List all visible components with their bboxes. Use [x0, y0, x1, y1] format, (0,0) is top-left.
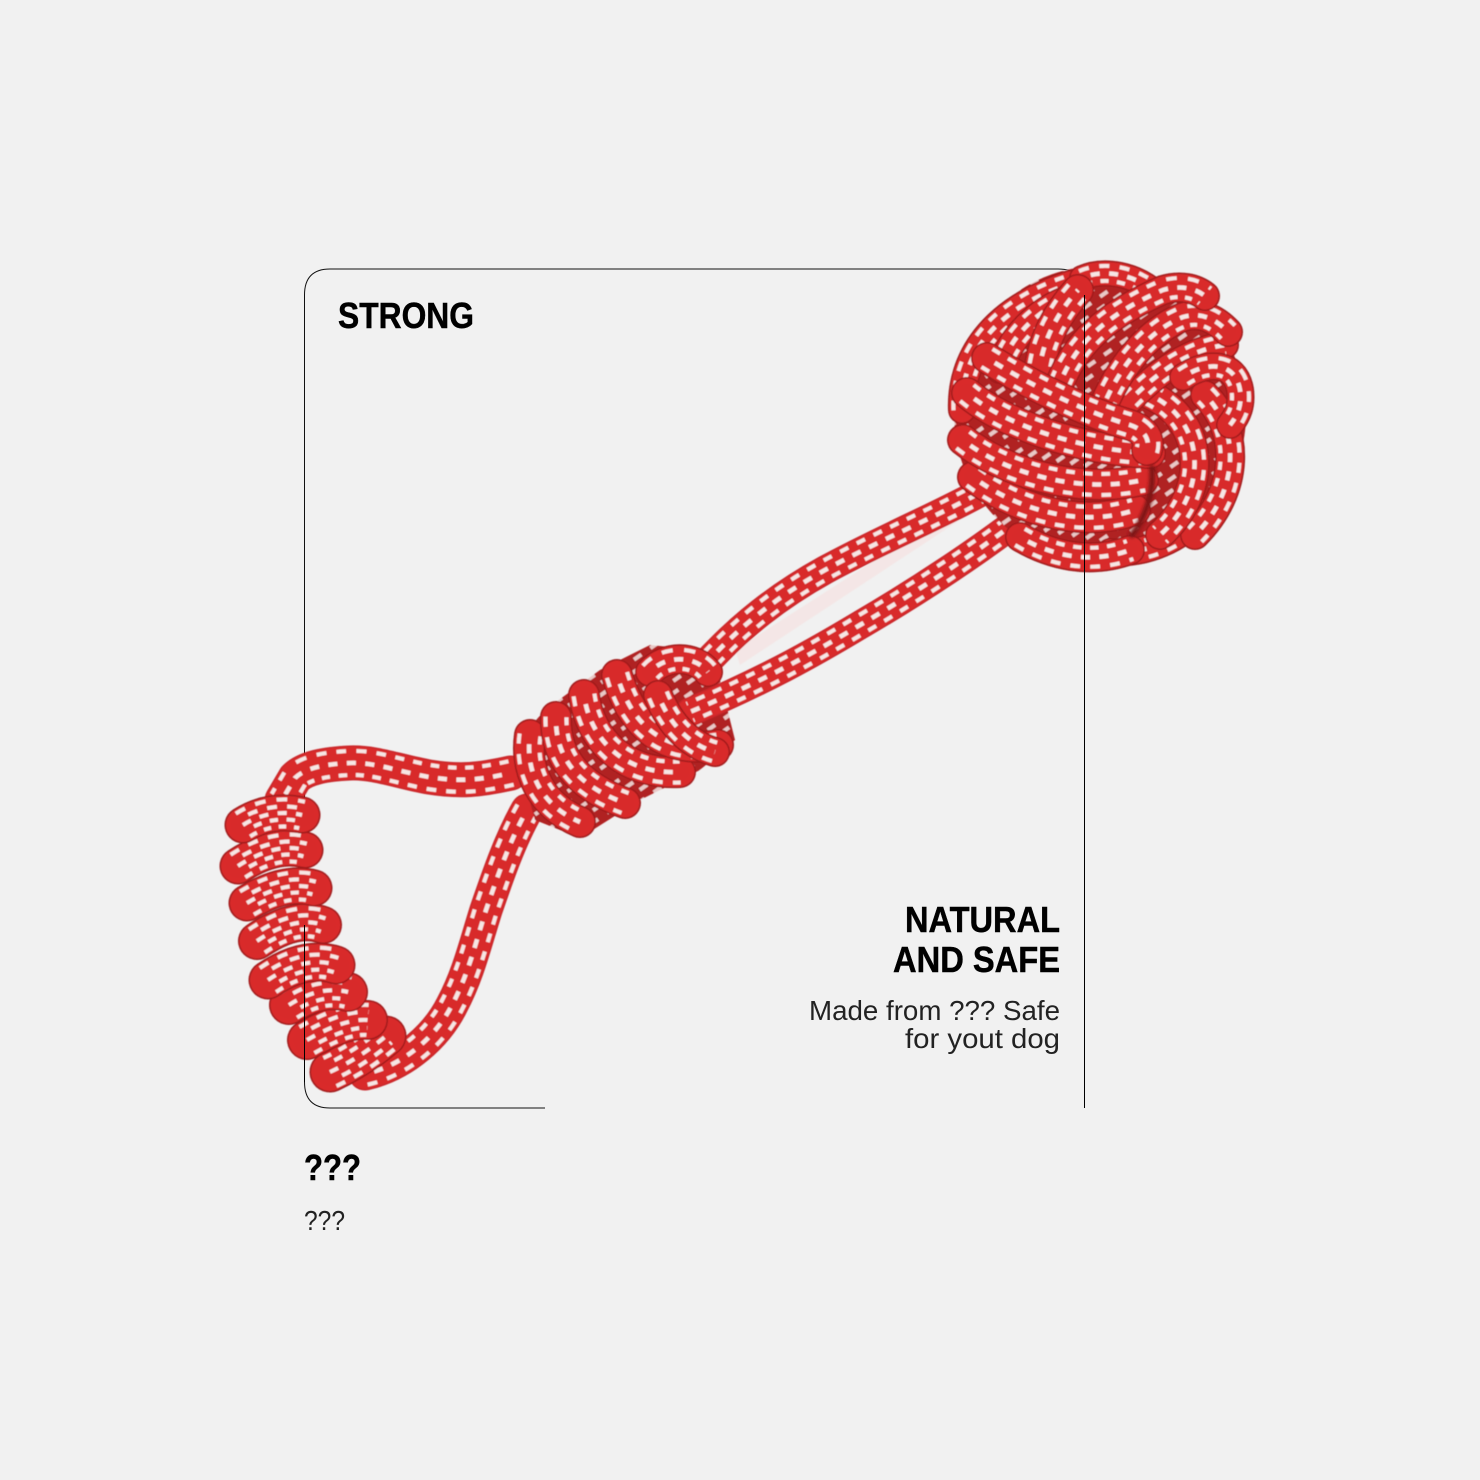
middle knot — [514, 515, 1025, 838]
callout: placeholder below frame: ??? — [304, 1147, 361, 1188]
frame lines in front of the rope — [304, 295, 1084, 1108]
callout: natural and safe: NATURAL — [905, 899, 1060, 940]
callout: natural and safe: for yout dog — [905, 1023, 1060, 1054]
dark crevice in ball — [1132, 468, 1152, 535]
coiled handle — [238, 813, 386, 1072]
callout: natural and safe — [809, 899, 1060, 1054]
knotted ball — [954, 266, 1246, 562]
callout: placeholder below frame — [304, 1147, 361, 1236]
twin ropes between knot and ball — [700, 490, 985, 670]
thin rope loop — [282, 763, 527, 1074]
red rope toy — [238, 266, 1246, 1074]
callout: placeholder below frame: ??? — [304, 1205, 345, 1236]
shadow reflection between handle ropes — [735, 520, 960, 665]
frame outline behind the rope — [304, 269, 1084, 1108]
heading: strong: STRONG — [338, 295, 474, 336]
callout: natural and safe: AND SAFE — [893, 939, 1060, 980]
callout: natural and safe: Made from ??? Safe — [809, 995, 1060, 1026]
